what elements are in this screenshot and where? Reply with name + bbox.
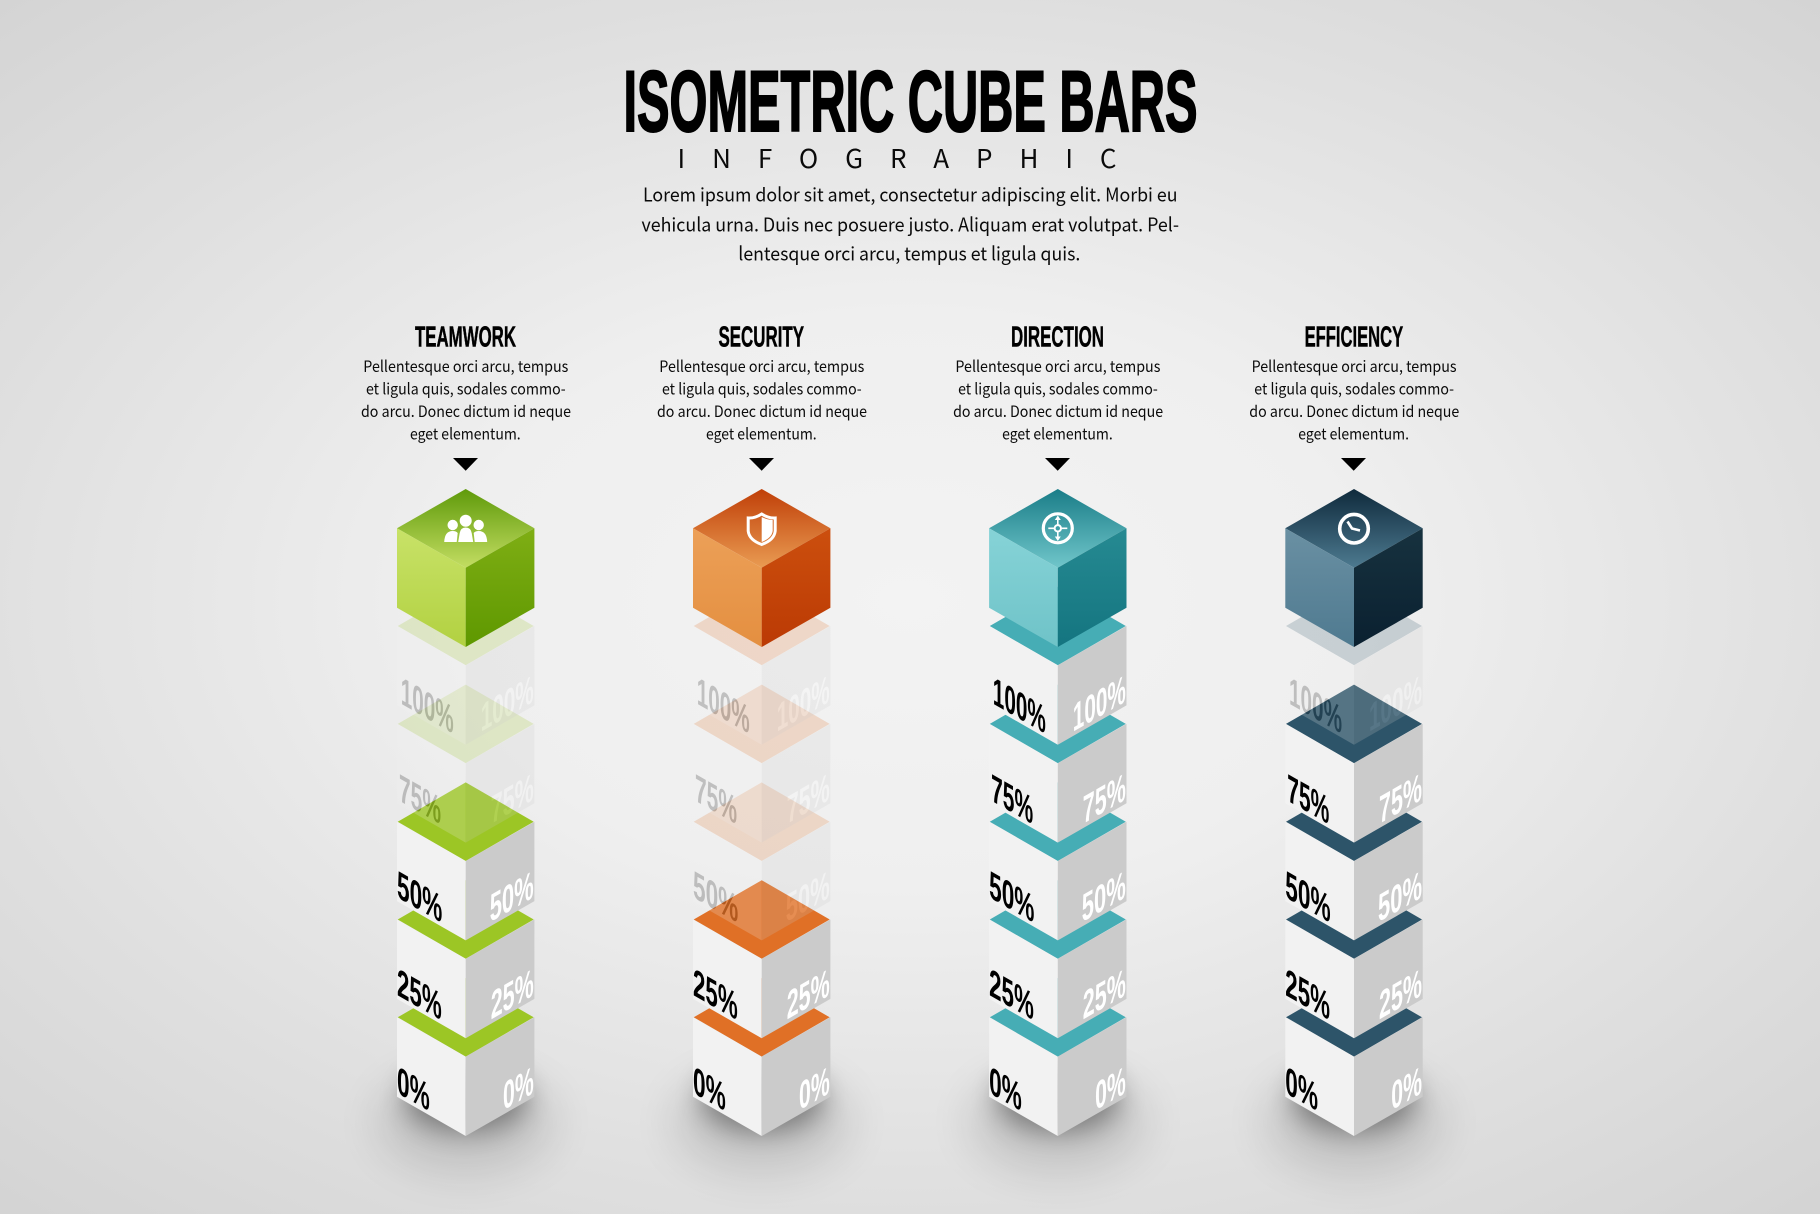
description: efficiency: et ligula quis, sodales commo- — [1254, 378, 1454, 400]
tier 100% faded: 100% — [481, 666, 534, 740]
tier 25% — [693, 880, 830, 1038]
tier 75% faded: 75% — [695, 765, 737, 833]
tier 75% faded — [397, 685, 534, 843]
tier 100% faded: 100% — [401, 668, 454, 742]
subtitle: INFOGRAPHIC — [678, 139, 1116, 176]
tier 100% faded — [693, 587, 830, 745]
tier 25%: 25% — [491, 960, 534, 1028]
tier 25%: 25% — [1379, 960, 1422, 1028]
tier 50%: 50% — [1378, 862, 1422, 931]
tier 100% faded — [397, 587, 534, 745]
tier 75% faded: 75% — [787, 764, 830, 832]
icon: people — [444, 515, 487, 542]
tier 100%: 100% — [993, 668, 1046, 742]
tier 0% — [693, 978, 830, 1136]
tier 75%: 75% — [1379, 764, 1422, 832]
tier 75%: 75% — [1287, 765, 1329, 833]
description: teamwork — [361, 355, 571, 444]
top cube — [989, 489, 1126, 647]
tier 0% — [989, 978, 1126, 1136]
intro text: vehicula urna. Duis nec posuere justo. Aliquam erat volutpat. Pel- — [642, 210, 1179, 238]
icon: compass — [1043, 514, 1072, 543]
arrow: teamwork — [453, 458, 478, 471]
tier 75% faded — [693, 685, 830, 843]
description: teamwork: eget elementum. — [410, 422, 521, 444]
arrow: direction — [1045, 458, 1070, 471]
arrow: efficiency — [1341, 458, 1366, 471]
tier 25% — [989, 880, 1126, 1038]
cube bar: security — [693, 489, 830, 1136]
tier 75% faded: 75% — [491, 764, 534, 832]
description: efficiency — [1249, 355, 1459, 444]
tier 75% — [989, 685, 1126, 843]
intro text: lentesque orci arcu, tempus et ligula quis. — [738, 240, 1080, 266]
tier 0% — [397, 978, 534, 1136]
tier 25%: 25% — [693, 960, 738, 1029]
description: security: Pellentesque orci arcu, tempus — [659, 355, 864, 377]
tier 50% — [989, 782, 1126, 940]
tier 50% — [1285, 782, 1423, 940]
tier 25%: 25% — [1083, 960, 1126, 1028]
title: ISOMETRIC CUBE BARS — [624, 54, 1198, 150]
tier 50%: 50% — [397, 862, 442, 931]
cube bar: teamwork — [397, 489, 534, 1136]
tier 75% faded: 75% — [399, 765, 441, 833]
tier 0%: 0% — [1391, 1058, 1422, 1119]
icon: shield — [748, 514, 775, 544]
description: direction: Pellentesque orci arcu, tempus — [955, 355, 1160, 377]
cube bar: direction — [989, 489, 1126, 1136]
tier 0% — [1285, 978, 1423, 1136]
top cube — [693, 489, 830, 647]
tier 0%: 0% — [397, 1057, 430, 1120]
top cube — [1285, 489, 1423, 647]
intro text — [642, 181, 1179, 266]
tier 25%: 25% — [787, 960, 830, 1028]
description: teamwork: et ligula quis, sodales commo- — [366, 378, 566, 400]
tier 50% faded: 50% — [693, 862, 738, 931]
cube bar: efficiency — [1285, 489, 1423, 1136]
panel: efficiency — [1249, 322, 1459, 1172]
tier 100% faded: 100% — [777, 666, 830, 740]
tier 25% — [397, 880, 534, 1038]
heading: security: SECURITY — [718, 322, 804, 354]
description: efficiency: do arcu. Donec dictum id neque — [1249, 400, 1459, 422]
tier 0%: 0% — [503, 1058, 534, 1119]
description: teamwork: do arcu. Donec dictum id neque — [361, 400, 571, 422]
description: efficiency: Pellentesque orci arcu, tempus — [1252, 355, 1457, 377]
tier 0%: 0% — [989, 1057, 1022, 1120]
shadow: teamwork — [378, 1064, 554, 1172]
top cube — [397, 489, 534, 647]
description: security: do arcu. Donec dictum id neque — [657, 400, 867, 422]
description: security — [657, 355, 867, 444]
tier 0%: 0% — [1095, 1058, 1126, 1119]
tier 100%: 100% — [1073, 666, 1126, 740]
tier 50%: 50% — [1082, 862, 1126, 931]
panel: teamwork — [361, 322, 571, 1172]
tier 50%: 50% — [490, 862, 534, 931]
tier 50%: 50% — [1285, 862, 1331, 931]
tier 0%: 0% — [693, 1057, 726, 1120]
tier 25% — [1285, 880, 1423, 1038]
description: direction: et ligula quis, sodales commo- — [958, 378, 1158, 400]
tier 50%: 50% — [989, 862, 1034, 931]
intro text: Lorem ipsum dolor sit amet, consectetur adipiscing elit. Morbi eu — [643, 181, 1178, 208]
tier 100% — [989, 587, 1126, 745]
tier 0%: 0% — [799, 1058, 830, 1119]
tier 75% — [1285, 685, 1423, 843]
tier 50% — [397, 782, 534, 940]
tier 25%: 25% — [989, 960, 1034, 1029]
tier 50% faded — [693, 782, 830, 940]
tier 0%: 0% — [1285, 1057, 1318, 1120]
heading: efficiency: EFFICIENCY — [1305, 322, 1403, 354]
arrow: security — [749, 458, 774, 471]
heading: teamwork: TEAMWORK — [415, 322, 516, 354]
description: teamwork: Pellentesque orci arcu, tempus — [363, 355, 568, 377]
tier 25%: 25% — [397, 960, 442, 1029]
tier 75%: 75% — [991, 765, 1033, 833]
tier 100% faded — [1285, 587, 1423, 745]
shadow: efficiency — [1266, 1064, 1442, 1172]
tier 75%: 75% — [1083, 764, 1126, 832]
panel: direction — [953, 322, 1163, 1172]
description: security: eget elementum. — [706, 422, 817, 444]
description: direction — [953, 355, 1163, 444]
shadow: security — [674, 1064, 850, 1172]
heading: direction: DIRECTION — [1011, 322, 1104, 354]
description: direction: eget elementum. — [1002, 422, 1113, 444]
tier 25%: 25% — [1285, 960, 1330, 1029]
description: efficiency: eget elementum. — [1298, 422, 1409, 444]
panel: security — [657, 322, 867, 1172]
description: direction: do arcu. Donec dictum id neque — [953, 400, 1163, 422]
icon: clock — [1340, 514, 1368, 543]
tier 100% faded: 100% — [1369, 666, 1422, 740]
tier 50% faded: 50% — [786, 862, 830, 931]
tier 100% faded: 100% — [1289, 668, 1342, 742]
tier 100% faded: 100% — [697, 668, 750, 742]
description: security: et ligula quis, sodales commo- — [662, 378, 862, 400]
shadow: direction — [970, 1064, 1146, 1172]
